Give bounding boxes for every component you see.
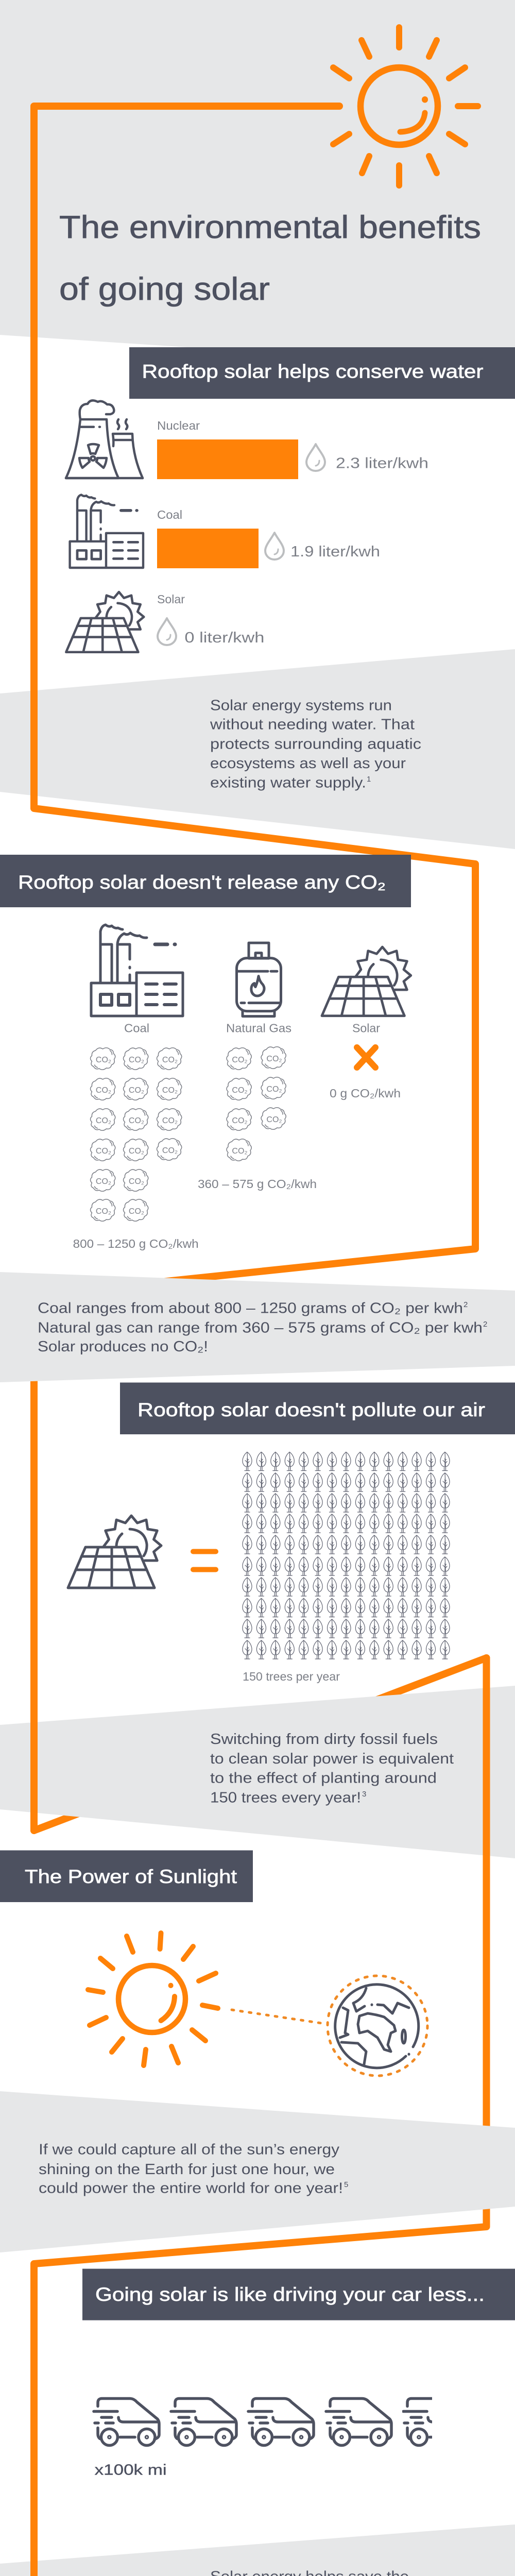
pictogram: coal CO2 clouds: CO₂ <box>96 1177 111 1186</box>
text block: CO2: 2 <box>483 1320 487 1329</box>
title <box>59 210 481 307</box>
pictogram: natural gas CO2 clouds: CO₂ <box>232 1086 248 1095</box>
text block: water: 1 <box>367 775 371 784</box>
panel: water section <box>66 347 515 791</box>
panel: trees text band <box>0 1686 515 1858</box>
pictogram: cars <box>94 2399 469 2445</box>
panel: driving section <box>82 2269 515 2576</box>
icon: solar panel <box>66 592 144 652</box>
pictogram: coal CO2 clouds: CO₂ <box>96 1086 111 1095</box>
orange timeline path, upper <box>34 106 475 1831</box>
pictogram: natural gas CO2 clouds: CO₂ <box>232 1056 248 1064</box>
text block: trees <box>210 1731 454 1806</box>
pictogram: natural gas CO2 clouds: CO₂ <box>232 1116 248 1125</box>
text block: CO2: Coal ranges from about 800 – 1250 grams of CO₂ per kwh <box>38 1300 463 1317</box>
text block: sunlight: shining on the Earth for just one hour, we <box>39 2161 335 2178</box>
heading: driving less <box>82 2269 515 2320</box>
pictogram: natural gas CO2 clouds: CO₂ <box>266 1115 282 1124</box>
label: x100k mi: x100k mi <box>95 2462 167 2479</box>
pictogram: natural gas CO2 clouds: CO₂ <box>232 1147 248 1156</box>
text block: trees: 3 <box>362 1790 366 1799</box>
pictogram: coal CO2 clouds: CO₂ <box>96 1207 111 1216</box>
panel: CO2 text band <box>0 1272 515 1382</box>
text block: CO2: Natural gas can range from 360 – 575 grams of CO₂ per kwh <box>38 1320 483 1336</box>
text block: sunlight: could power the entire world for one year! <box>39 2180 343 2197</box>
pictogram: coal CO2 clouds: CO₂ <box>96 1056 111 1064</box>
icon: header sun <box>333 27 478 185</box>
value: coal CO2: 800 – 1250 g CO₂/kwh <box>73 1237 199 1250</box>
orange timeline path, lower <box>34 1658 486 2576</box>
heading: power of sunlight: The Power of Sunlight <box>25 1866 237 1887</box>
icon: nuclear plant <box>66 400 143 478</box>
text block: trees: 150 trees every year! <box>210 1790 361 1806</box>
text block: sunlight: 5 <box>344 2180 348 2189</box>
pictogram: coal CO2 clouds: CO₂ <box>96 1116 111 1125</box>
heading: conserve water <box>129 347 515 399</box>
pictogram: natural gas CO2 clouds <box>227 1047 286 1161</box>
panel: sunlight text band <box>0 2091 515 2252</box>
heading: conserve water: Rooftop solar helps conserve water <box>142 361 483 382</box>
pictogram: coal CO2 clouds: CO₂ <box>129 1207 144 1216</box>
panel: air section <box>68 1383 515 1806</box>
pictogram: coal CO2 clouds: CO₂ <box>129 1056 144 1064</box>
text block: sunlight <box>39 2142 348 2197</box>
pictogram: coal CO2 clouds: CO₂ <box>129 1116 144 1125</box>
pictogram: coal CO2 clouds: CO₂ <box>96 1147 111 1156</box>
bar: coal water use <box>157 529 259 568</box>
text block: water: protects surrounding aquatic <box>210 736 421 753</box>
pictogram: coal CO2 clouds: CO₂ <box>162 1056 178 1064</box>
pictogram: coal CO2 clouds: CO₂ <box>162 1086 178 1095</box>
text block: CO2: Solar produces no CO₂! <box>38 1338 208 1355</box>
icon: orange X <box>357 1047 375 1067</box>
arrow: dotted sunlight ray <box>232 2010 325 2024</box>
label: nuclear: Nuclear <box>157 419 200 432</box>
text block: CO2 <box>38 1300 487 1355</box>
heading: CO2: Rooftop solar doesn't release any CO₂ <box>18 872 386 893</box>
pictogram: natural gas CO2 clouds: CO₂ <box>266 1085 282 1094</box>
icon: coal plant <box>70 495 143 568</box>
pictogram: natural gas CO2 clouds: CO₂ <box>266 1055 282 1063</box>
value: nuclear: 2.3 liter/kwh <box>336 455 428 472</box>
icon: water drop <box>306 444 325 471</box>
heading: power of sunlight <box>0 1851 253 1902</box>
value: natural gas CO2: 360 – 575 g CO₂/kwh <box>198 1177 317 1191</box>
text block: water: without needing water. That <box>210 717 415 733</box>
orange timeline segment passing behind the sunlight band <box>34 1658 486 1831</box>
heading: pollute air <box>120 1383 515 1434</box>
pictogram: coal CO2 clouds: CO₂ <box>162 1146 178 1155</box>
icon: sun <box>88 1933 218 2065</box>
icon: earth <box>328 1976 427 2076</box>
text block: water: ecosystems as well as your <box>210 755 406 772</box>
value: solar CO2: 0 g CO₂/kwh <box>330 1087 401 1100</box>
text block: water: Solar energy systems run <box>210 698 392 714</box>
panel: water text band <box>0 649 515 849</box>
value: solar: 0 liter/kwh <box>184 630 264 646</box>
icon: water drop <box>265 533 284 560</box>
pictogram: coal CO2 clouds: CO₂ <box>162 1116 178 1125</box>
pictogram: coal CO2 clouds: CO₂ <box>129 1147 144 1156</box>
panel: header background band <box>0 0 515 369</box>
text block: water <box>210 698 421 791</box>
pictogram: coal CO2 clouds <box>91 1048 182 1221</box>
heading: CO2 <box>0 855 411 907</box>
icon: solar panel <box>322 947 411 1016</box>
text block: trees: to clean solar power is equivalent <box>210 1751 454 1767</box>
panel: CO2 section <box>0 855 487 1355</box>
icon: natural gas tank <box>237 943 281 1016</box>
value: coal: 1.9 liter/kwh <box>290 544 380 560</box>
icon: solar panel <box>68 1516 161 1588</box>
label: coal: Coal <box>157 508 182 521</box>
heading: pollute air: Rooftop solar doesn't pollute our air <box>138 1399 485 1420</box>
text block: CO2: 2 <box>464 1300 468 1309</box>
icon: coal plant <box>91 925 183 1016</box>
label: trees per year: 150 trees per year <box>243 1670 340 1683</box>
bar: nuclear water use <box>157 439 298 479</box>
pictogram: coal CO2 clouds: CO₂ <box>129 1177 144 1186</box>
text block: trees: to the effect of planting around <box>210 1770 437 1787</box>
label: coal: Coal <box>124 1022 149 1035</box>
text block: water: existing water supply. <box>210 775 366 791</box>
text block: sunlight: If we could capture all of the sun’s energy <box>39 2142 340 2158</box>
pictogram: 150 trees <box>243 1452 450 1659</box>
title: of going solar <box>59 272 270 307</box>
panel: sunlight section <box>0 1851 427 2197</box>
icon: equals sign <box>193 1552 216 1569</box>
pictogram: coal CO2 clouds: CO₂ <box>129 1086 144 1095</box>
panel: driving text band <box>0 2524 515 2576</box>
label: solar: Solar <box>352 1022 380 1035</box>
label: solar: Solar <box>157 592 185 606</box>
icon: water drop <box>158 618 176 645</box>
text block: trees: Switching from dirty fossil fuels <box>210 1731 438 1748</box>
title: The environmental benefits <box>59 210 481 245</box>
label: natural gas: Natural Gas <box>226 1022 291 1035</box>
heading: driving less: Going solar is like driving your car less... <box>95 2284 485 2305</box>
